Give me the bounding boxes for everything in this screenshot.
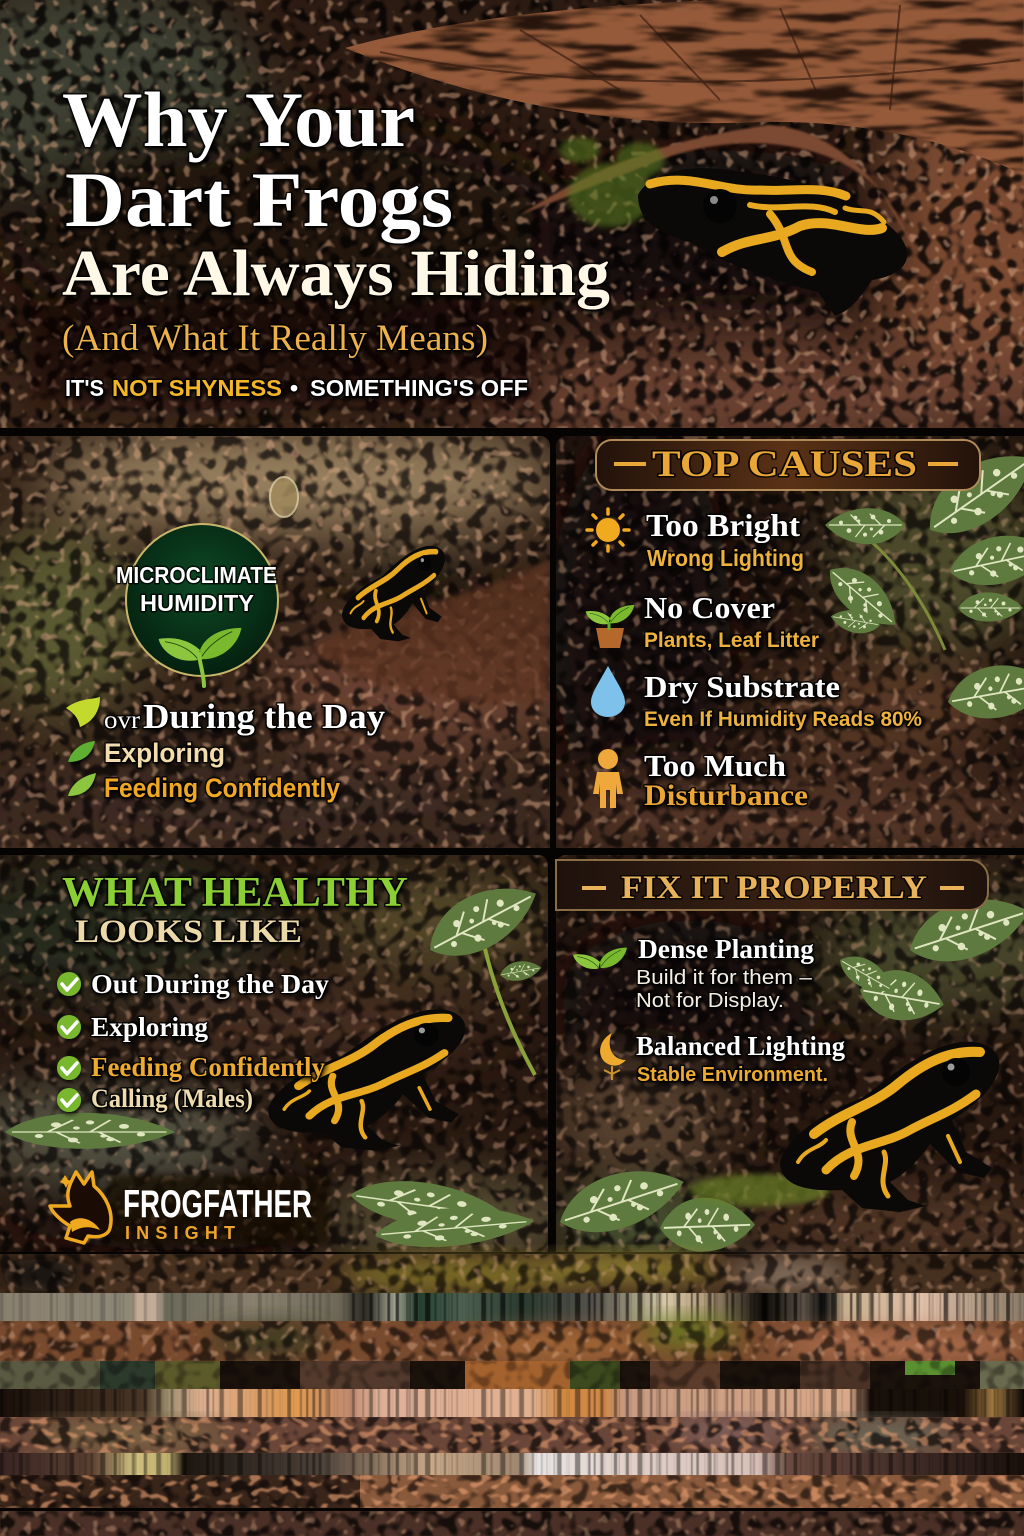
strip: stretched pixels <box>0 1293 1024 1321</box>
fix: balanced lighting <box>636 1031 845 1086</box>
heading <box>62 870 408 950</box>
cause: too bright: Too Bright <box>646 507 800 543</box>
frog <box>780 1042 999 1212</box>
tagline: IT'S <box>65 375 104 401</box>
logo: frogfather insight: FROGFATHER <box>123 1183 312 1226</box>
strip: orange pebbles <box>0 1475 1024 1508</box>
tagline: SOMETHING'S OFF <box>310 375 528 401</box>
cause: too bright: Wrong Lighting <box>647 545 804 571</box>
cause: no cover: Plants, Leaf Litter <box>644 629 819 652</box>
strip: bottom dark texture <box>0 1511 1024 1536</box>
tagline: NOT SHYNESS <box>112 375 282 401</box>
seal: microclimate humidity: MICROCLIMATE <box>116 562 277 588</box>
fix: balanced lighting: Stable Environment. <box>637 1064 828 1086</box>
banner: top causes: TOP CAUSES <box>652 444 917 485</box>
strip: pale stretched pixels <box>0 1453 1024 1475</box>
banner: fix it properly <box>556 860 988 910</box>
cause: too much disturbance: Disturbance <box>644 779 808 812</box>
seal: microclimate humidity <box>116 524 278 686</box>
tagline <box>65 375 528 401</box>
title: Why Your <box>62 76 415 163</box>
fix: dense planting: Build it for them – <box>636 967 813 989</box>
checklist <box>57 969 330 1113</box>
foliage <box>551 883 1024 1253</box>
checklist: Exploring <box>91 1012 209 1042</box>
list: during the day <box>66 697 386 803</box>
checklist: Calling (Males) <box>91 1084 253 1113</box>
panel: what healthy looks like <box>0 855 590 1260</box>
cause: no cover: No Cover <box>644 590 775 625</box>
icon: moon <box>600 1033 626 1080</box>
large dead leaf <box>340 0 1024 250</box>
foliage <box>825 456 1024 718</box>
subtitle: (And What It Really Means) <box>62 318 488 359</box>
list: during the day: Feeding Confidently <box>104 773 340 803</box>
strip: mixed fragments <box>0 1361 1024 1389</box>
cause: dry substrate <box>644 669 922 731</box>
frog <box>638 168 907 316</box>
banner: fix it properly: FIX IT PROPERLY <box>621 870 927 906</box>
cause: too much disturbance <box>644 748 808 812</box>
title: Dart Frogs <box>65 156 453 243</box>
logo: frogfather insight: INSIGHT <box>125 1223 235 1243</box>
cause: dry substrate: Dry Substrate <box>644 669 840 704</box>
frog <box>268 1009 465 1151</box>
glitched photo strips <box>0 1254 1024 1536</box>
icon: potted sprout <box>586 605 634 648</box>
fern <box>560 137 664 227</box>
tagline: • <box>290 375 298 401</box>
strip: orange texture <box>0 1318 1024 1361</box>
icon: sun <box>587 509 629 551</box>
banner: top causes <box>596 440 980 490</box>
fix: dense planting <box>636 934 815 1012</box>
panel: hero <box>0 0 1024 450</box>
panel: top causes <box>540 430 1024 860</box>
dark wash behind text <box>30 300 540 408</box>
checklist: Out During the Day <box>91 969 330 999</box>
icon: leaf <box>573 948 627 969</box>
frog <box>342 546 445 641</box>
icon: water drop <box>591 666 625 717</box>
list: during the day: During the Day <box>143 697 386 736</box>
logo: frogfather insight <box>50 1172 312 1243</box>
strip: copper stretched pixels <box>0 1389 1024 1417</box>
cause: no cover <box>644 590 819 652</box>
strip: pebbles <box>0 1417 1024 1453</box>
icon: person <box>593 749 623 808</box>
list: during the day: Exploring <box>104 738 225 768</box>
cause: too bright <box>646 507 804 571</box>
fix: dense planting: Dense Planting <box>638 934 815 964</box>
logo backing <box>110 1175 330 1245</box>
panel: fix it properly <box>550 855 1024 1255</box>
cause: too much disturbance: Too Much <box>644 748 786 783</box>
panel: microclimate humidity <box>0 430 570 860</box>
fix: dense planting: Not for Display. <box>636 990 784 1012</box>
cause: dry substrate: Even If Humidity Reads 80% <box>644 708 922 731</box>
title <box>62 76 610 310</box>
heading: WHAT HEALTHY <box>62 870 408 916</box>
seal: microclimate humidity: HUMIDITY <box>140 590 254 616</box>
fix: balanced lighting: Balanced Lighting <box>636 1031 845 1061</box>
strip: foliage texture <box>0 1254 1024 1293</box>
title: Are Always Hiding <box>62 237 610 310</box>
checklist: Feeding Confidently <box>91 1052 325 1082</box>
foliage <box>5 868 548 1253</box>
list: during the day: ovr <box>104 707 141 734</box>
heading: LOOKS LIKE <box>75 914 302 950</box>
